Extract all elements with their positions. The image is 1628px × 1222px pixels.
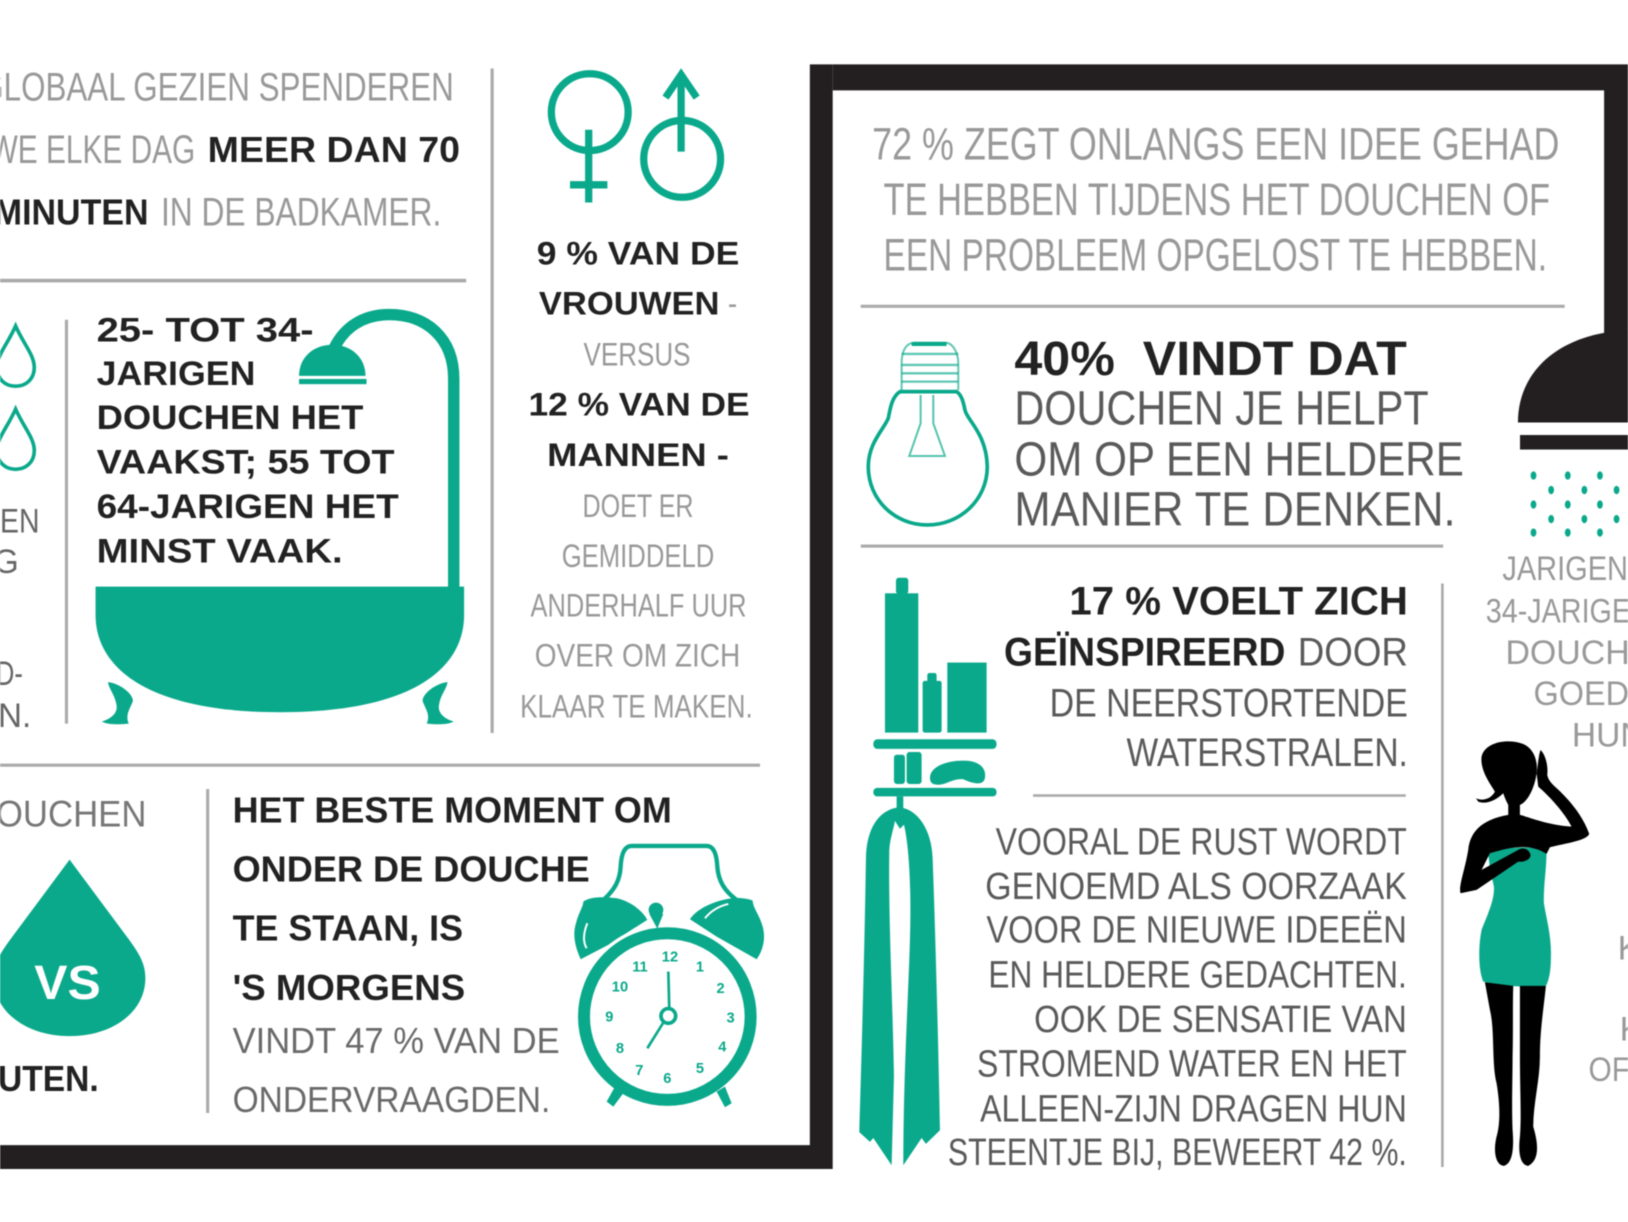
icon: alarm clock: 10 xyxy=(612,980,628,996)
text block: women vs men: VERSUS xyxy=(584,336,690,372)
text block: 40 percent clear thinking: 40% VINDT DAT xyxy=(1014,333,1407,386)
block: shower vs drop: UTEN. xyxy=(0,1058,99,1099)
text block: age groups xyxy=(97,312,399,571)
text block: rest as cause: STEENTJE BIJ, BEWEERT 42 %. xyxy=(948,1131,1407,1174)
text block: best moment: ONDERVRAAGDEN. xyxy=(233,1079,550,1120)
icon: alarm clock: 9 xyxy=(605,1010,613,1026)
text block: women vs men: MANNEN - xyxy=(547,437,729,473)
text block: women vs men: 12 % VAN DE xyxy=(528,386,750,422)
text block: 17 percent inspired: DE NEERSTORTENDE xyxy=(1050,681,1408,725)
text block: 40 percent clear thinking: OM OP EEN HELDERE xyxy=(1014,434,1464,487)
text block: age groups: 64-JARIGEN HET xyxy=(97,488,399,526)
text block: 17 percent inspired: WATERSTRALEN. xyxy=(1127,731,1408,775)
icon: woman in towel xyxy=(1460,741,1589,1166)
block: shower vs drop xyxy=(0,792,146,1099)
text block: best moment: VINDT 47 % VAN DE xyxy=(233,1020,560,1061)
icon: alarm clock: 11 xyxy=(632,960,648,976)
text block: rest as cause: EN HELDERE GEDACHTEN. xyxy=(988,953,1407,996)
text block: 17 percent inspired: DOOR xyxy=(1298,631,1408,675)
text block: global time in bathroom: MEER DAN 70 xyxy=(208,129,460,170)
text block: age groups: 25- TOT 34- xyxy=(97,312,314,350)
text block: women vs men: GEMIDDELD xyxy=(562,538,714,574)
text block: age groups: JARIGEN xyxy=(97,355,255,393)
text block: age groups: DOUCHEN HET xyxy=(97,399,363,437)
text block: best moment: HET BESTE MOMENT OM xyxy=(233,789,672,830)
text block: rest as cause: VOOR DE NIEUWE IDEEËN xyxy=(986,909,1407,952)
text block: age groups: MINST VAAK. xyxy=(97,533,343,571)
text block: 72 percent idea xyxy=(872,118,1559,280)
text block: best moment xyxy=(233,789,672,1120)
block: shower vs drop: VS xyxy=(34,957,101,1010)
clipped text right column xyxy=(1486,550,1628,1089)
icon: alarm clock: 2 xyxy=(717,981,725,997)
text block: global time in bathroom: IN DE BADKAMER. xyxy=(161,190,441,234)
icon: alarm clock xyxy=(574,846,764,1108)
icon: alarm clock: 5 xyxy=(696,1061,704,1077)
icon: gender symbols xyxy=(551,74,721,202)
text block: women vs men: OVER OM ZICH xyxy=(535,638,740,674)
text block: women vs men: ANDERHALF UUR xyxy=(531,588,747,624)
icon: alarm clock: 12 xyxy=(662,950,678,966)
block: shower vs drop: OUCHEN xyxy=(0,792,146,834)
text block: 17 percent inspired xyxy=(1004,580,1408,775)
icon: bathtub with shower xyxy=(96,315,464,724)
text block: women vs men: - xyxy=(728,286,737,322)
icon: alarm clock: 6 xyxy=(663,1071,671,1087)
text block: 40 percent clear thinking xyxy=(1014,333,1464,536)
icon: water droplets xyxy=(1531,471,1619,537)
icon: alarm clock: 1 xyxy=(696,960,704,976)
icon: shelf with bottles and towel xyxy=(859,578,997,1165)
clipped text under drops xyxy=(0,503,39,735)
text block: best moment: TE STAAN, IS xyxy=(233,908,463,949)
icon: alarm clock: 3 xyxy=(727,1011,735,1027)
text block: best moment: ONDER DE DOUCHE xyxy=(233,848,590,889)
icon: water drops outline xyxy=(0,326,34,469)
text block: women vs men xyxy=(520,236,753,724)
text block: 17 percent inspired: GEÏNSPIREERD xyxy=(1004,631,1285,675)
text block: rest as cause xyxy=(948,820,1407,1174)
icon: alarm clock: 7 xyxy=(635,1063,643,1079)
text block: best moment: 'S MORGENS xyxy=(233,967,465,1008)
text block: global time in bathroom xyxy=(0,66,460,234)
text block: women vs men: VROUWEN xyxy=(539,286,720,322)
black frame: right panel top bar xyxy=(810,64,1628,343)
icon: black shower head xyxy=(1518,330,1628,450)
text block: rest as cause: STROMEND WATER EN HET xyxy=(977,1043,1407,1086)
text block: women vs men: DOET ER xyxy=(582,488,694,524)
text block: 40 percent clear thinking: DOUCHEN JE HELPT xyxy=(1014,383,1429,436)
text block: age groups: VAAKST; 55 TOT xyxy=(97,443,395,481)
text block: rest as cause: VOORAL DE RUST WORDT xyxy=(996,820,1407,863)
text block: women vs men: 9 % VAN DE xyxy=(537,236,739,272)
black frame: left panel xyxy=(0,64,833,1169)
text block: women vs men: KLAAR TE MAKEN. xyxy=(520,688,753,724)
text block: 40 percent clear thinking: MANIER TE DENKEN. xyxy=(1014,483,1456,536)
icon: alarm clock: 4 xyxy=(718,1040,727,1056)
text block: 17 percent inspired: 17 % VOELT ZICH xyxy=(1069,580,1408,624)
text block: rest as cause: OOK DE SENSATIE VAN xyxy=(1034,998,1407,1041)
icon: alarm clock: 8 xyxy=(616,1041,624,1057)
text block: rest as cause: GENOEMD ALS OORZAAK xyxy=(985,865,1407,908)
clipped text under drops: EN xyxy=(0,503,39,541)
text block: rest as cause: ALLEEN-ZIJN DRAGEN HUN xyxy=(980,1087,1407,1130)
icon: light bulb xyxy=(868,343,987,525)
